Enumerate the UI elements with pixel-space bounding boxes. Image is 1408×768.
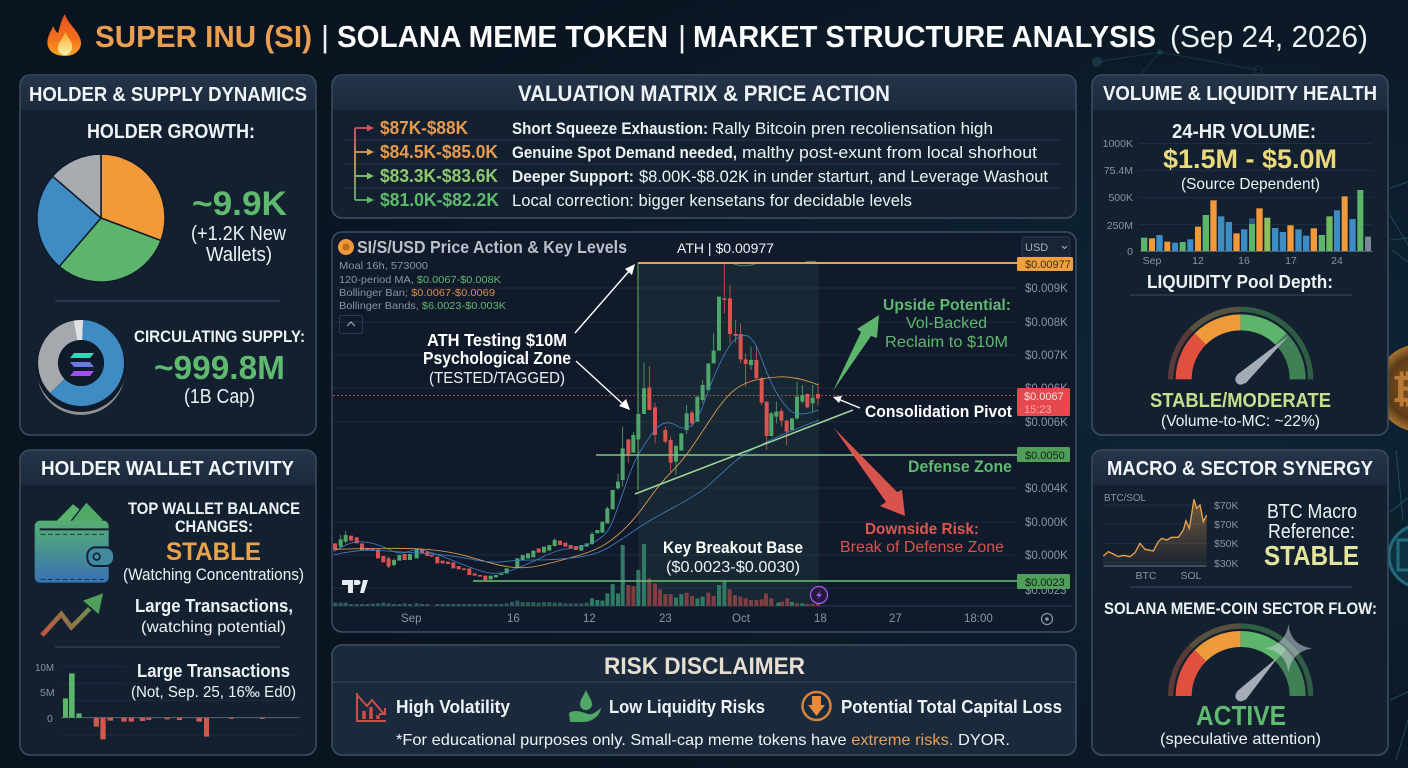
holder count stat	[191, 185, 287, 266]
large transactions note: (watching potential)	[141, 619, 286, 636]
donut chart: circulating supply	[36, 322, 126, 415]
moving average lines	[333, 261, 819, 573]
price axis: $0.009K	[1025, 283, 1068, 295]
indicator legend: Bollinger Bands, $6.0023-$0.003K	[339, 300, 506, 312]
line chart: BTC/SOL: $30K	[1214, 558, 1239, 570]
sector flow status: ACTIVE	[1196, 700, 1286, 731]
bar chart: large transactions: 10M	[35, 662, 54, 674]
item: high volatility	[357, 693, 510, 721]
holder count stat: Wallets)	[206, 244, 272, 266]
icon: lightning badge	[810, 586, 828, 604]
time axis: Sep	[401, 613, 421, 625]
BTC macro stat: BTC Macro	[1267, 501, 1357, 523]
item: low liquidity	[569, 690, 765, 722]
icon: wallet	[35, 502, 114, 583]
BTC macro stat: STABLE	[1264, 540, 1359, 571]
row: short squeeze exhaustion	[380, 118, 993, 138]
icon: falling chart	[357, 693, 386, 721]
panel: valuation matrix and price action	[332, 75, 1076, 218]
row: deeper support: Deeper Support:	[512, 168, 634, 186]
arrow: to ATH	[575, 264, 635, 333]
time axis: 23	[659, 613, 672, 625]
large transactions detail: (Not, Sep. 25, 16‰ Ed0)	[131, 684, 296, 701]
currency selector: USD	[1025, 242, 1048, 254]
tag: defense level	[1017, 447, 1070, 462]
sector flow status: (speculative attention)	[1160, 731, 1321, 748]
row: deeper support	[380, 166, 1048, 186]
row: local correction: $81.0K-$82.2K	[380, 190, 499, 210]
green bodies	[341, 297, 813, 579]
panel: volume and liquidity health	[1092, 75, 1388, 435]
bar chart: 24h volume: 24	[1331, 255, 1343, 267]
heading: holder and supply dynamics: HOLDER & SUPPLY DYNAMICS	[29, 84, 307, 106]
heading: holder wallet activity: HOLDER WALLET ACTIVITY	[41, 458, 295, 480]
arrow: to breakout candle	[576, 361, 630, 410]
heading: risk disclaimer: RISK DISCLAIMER	[604, 653, 805, 680]
tag: ATH price: $0.00977	[1025, 259, 1071, 271]
price axis: $0.007K	[1025, 350, 1068, 362]
heading: volume and liquidity health: VOLUME & LIQUIDITY HEALTH	[1103, 83, 1377, 105]
wicks	[341, 333, 813, 568]
bar chart: 24h volume: 500K	[1108, 192, 1133, 204]
tag: current price: 15:23	[1024, 404, 1052, 416]
row: deeper support: $8.00K-$8.02K in under starturt, and Leverage Washout	[639, 168, 1048, 186]
annotation: downside risk: Break of Defense Zone	[840, 539, 1004, 556]
large transactions detail	[131, 661, 296, 701]
annotation: ATH testing zone: ATH Testing $10M	[427, 330, 567, 350]
line chart: BTC/SOL: SOL	[1180, 570, 1202, 582]
annotation: key breakout base: Key Breakout Base	[663, 539, 803, 557]
price axis: $0.004K	[1025, 483, 1068, 495]
bar chart: large transactions: 0	[47, 713, 53, 725]
tag: base level	[1017, 574, 1070, 589]
circulating supply stat: CIRCULATING SUPPLY:	[134, 327, 305, 346]
annotation: consolidation pivot: Consolidation Pivot	[865, 402, 1012, 421]
bar chart: 24h volume: 17	[1285, 255, 1297, 267]
icon: solana logo	[70, 353, 94, 376]
time axis: 18:00	[964, 613, 993, 625]
annotation: downside risk	[840, 521, 1004, 556]
circulating supply stat: ~999.8M	[154, 349, 285, 386]
volume stat: (Source Dependent)	[1181, 176, 1320, 193]
annotation: key breakout base: ($0.0023-$0.0030)	[666, 559, 800, 576]
annotation: downside risk: Downside Risk:	[865, 521, 979, 538]
holder count stat: (+1.2K New	[191, 223, 286, 245]
BTC macro stat: Reference:	[1268, 521, 1355, 543]
row: short squeeze exhaustion: Rally Bitcoin pren recoliensation high	[712, 120, 993, 138]
icon: flame	[47, 14, 81, 56]
gauge: sector flow	[1171, 624, 1312, 701]
row: short squeeze exhaustion: Short Squeeze Exhaustion:	[512, 120, 708, 138]
bar chart: 24h volume: 16	[1238, 255, 1250, 267]
volume stat: $1.5M - $5.0M	[1163, 144, 1337, 174]
sector flow status	[1160, 700, 1321, 748]
volume stat	[1163, 121, 1337, 193]
pie chart: holder growth	[37, 154, 165, 282]
icon: down arrow in circle	[802, 692, 830, 720]
row: genuine spot demand: malthy post-exunt from local shorhout	[742, 144, 1037, 162]
title: |	[321, 19, 329, 54]
row: deeper support: $83.3K-$83.6K	[380, 166, 498, 186]
annotation: ATH testing zone: Psychological Zone	[423, 348, 571, 368]
title: SOLANA MEME TOKEN	[337, 19, 668, 54]
bar chart: 24h volume: 0	[1127, 246, 1133, 258]
arrow: downside	[834, 428, 905, 516]
line chart: BTC/SOL	[1103, 492, 1239, 582]
wallet balance stat	[123, 499, 304, 584]
collapse button	[340, 316, 362, 334]
annotation: key breakout base	[663, 539, 803, 576]
wallet balance stat: STABLE	[166, 538, 261, 566]
volume stat: 24-HR VOLUME:	[1172, 121, 1316, 143]
line chart: BTC/SOL: $70K	[1214, 500, 1239, 512]
large transactions note	[135, 596, 293, 636]
heading: holder growth: HOLDER GROWTH:	[87, 121, 255, 143]
time axis: 16	[507, 613, 520, 625]
row: genuine spot demand: Genuine Spot Demand needed,	[512, 144, 737, 162]
title: SUPER INU (SI)	[95, 19, 312, 54]
currency selector	[1022, 237, 1070, 257]
item: high volatility: High Volatility	[396, 697, 510, 717]
level line: defense zone	[596, 454, 1017, 456]
row: local correction: Local correction: bigger kensetans for decidable levels	[512, 192, 912, 210]
tag: base level: $0.0023	[1025, 577, 1065, 589]
trend line	[635, 410, 853, 494]
price axis: $0.000K	[1025, 517, 1068, 529]
annotation: upside potential: Reclaim to $10M	[885, 334, 1008, 351]
row: genuine spot demand	[380, 142, 1037, 162]
heading: valuation matrix: VALUATION MATRIX & PRICE ACTION	[518, 81, 890, 106]
annotation: upside potential	[883, 297, 1011, 351]
liquidity status: (Volume-to-MC: ~22%)	[1161, 413, 1320, 430]
price axis: $0.008K	[1025, 317, 1068, 329]
tag: current price: $0.0067	[1024, 391, 1064, 403]
row: local correction	[380, 190, 912, 210]
panel: price chart	[332, 232, 1076, 632]
item: low liquidity: Low Liquidity Risks	[609, 697, 765, 717]
tag: current price	[1017, 388, 1070, 416]
bar chart: 24h volume: 12	[1192, 255, 1204, 267]
arrow: upside	[833, 315, 879, 391]
price axis	[1025, 283, 1068, 597]
time axis: 18	[814, 613, 827, 625]
large transactions detail: Large Transactions	[137, 661, 290, 681]
red bodies	[335, 298, 818, 580]
circulating supply stat: (1B Cap)	[184, 386, 255, 408]
line chart: BTC/SOL: BTC/SOL	[1104, 492, 1146, 504]
bar chart: large transactions: 5M	[40, 687, 55, 699]
time axis	[401, 613, 993, 625]
liquidity status: STABLE/MODERATE	[1150, 390, 1331, 412]
panel: macro and sector synergy	[1092, 450, 1388, 755]
row: short squeeze exhaustion: $87K-$88K	[380, 118, 468, 138]
title: |	[678, 19, 686, 54]
time axis: Oct	[732, 613, 751, 625]
row: genuine spot demand: $84.5K-$85.0K	[380, 142, 498, 162]
icon: trend arrow	[42, 593, 103, 635]
wallet balance stat: TOP WALLET BALANCE	[128, 499, 300, 518]
icon: coin	[338, 239, 354, 255]
indicator legend	[339, 260, 506, 312]
indicator legend: Moal 16h, 573000	[339, 260, 428, 272]
time axis: 12	[583, 613, 596, 625]
bar chart: 24h volume: 1000K	[1103, 138, 1133, 150]
logo: tradingview mark	[342, 580, 368, 593]
icon: settings	[1042, 614, 1052, 624]
wallet balance stat: CHANGES:	[175, 517, 253, 536]
annotation: upside potential: Upside Potential:	[883, 297, 1011, 314]
price axis: $0.0023	[1025, 585, 1067, 597]
line chart: BTC/SOL: $70K	[1214, 519, 1239, 531]
bar chart: large transactions	[35, 662, 300, 739]
annotation: ATH testing zone: (TESTED/TAGGED)	[429, 370, 565, 387]
indicator legend: Bollinger Ban; $0.0067-$0.0069	[339, 287, 495, 299]
icon: bitcoin coin backdrop	[1376, 344, 1408, 432]
chart title: SI/S/USD Price Action & Key Levels	[357, 237, 627, 257]
annotation: upside potential: Vol-Backed	[906, 315, 987, 332]
line chart: BTC/SOL: $50K	[1214, 538, 1239, 550]
icon: chip coin backdrop	[1389, 525, 1408, 587]
circulating supply stat	[134, 327, 305, 408]
panel: risk disclaimer	[332, 645, 1076, 755]
bar chart: 24h volume: Sep	[1143, 255, 1161, 267]
large transactions note: Large Transactions,	[135, 596, 293, 616]
ATH label: ATH | $0.00977	[677, 240, 774, 256]
tag: defense level: $0.0050	[1025, 450, 1065, 462]
BTC macro stat	[1264, 501, 1359, 571]
arrow tree: price levels	[355, 124, 374, 204]
heading: macro and sector synergy: MACRO & SECTOR SYNERGY	[1107, 458, 1374, 480]
panel: holder wallet activity	[20, 450, 316, 755]
wallet balance stat: (Watching Concentrations)	[123, 565, 304, 584]
time axis: 27	[889, 613, 902, 625]
price axis: $0.006K	[1025, 417, 1068, 429]
heading: liquidity pool depth: LIQUIDITY Pool Depth:	[1147, 272, 1333, 292]
panel: holder and supply dynamics	[20, 75, 316, 435]
line chart: BTC/SOL: BTC	[1136, 570, 1157, 582]
title: (Sep 24, 2026)	[1170, 19, 1368, 54]
price axis: $0.000K	[1025, 550, 1068, 562]
title: MARKET STRUCTURE ANALYSIS	[693, 19, 1156, 54]
candlestick chart	[333, 261, 819, 606]
level line: ATH	[638, 262, 1017, 264]
level line: breakout base	[473, 580, 1017, 582]
title	[47, 14, 1368, 56]
item: capital loss: Potential Total Capital Loss	[841, 697, 1062, 717]
item: capital loss	[802, 692, 1062, 720]
price axis: $0.006K	[1025, 383, 1068, 395]
heading: sector flow: SOLANA MEME-COIN SECTOR FLOW:	[1104, 600, 1377, 618]
icon: water drop over hand	[569, 690, 601, 722]
bar chart: 24h volume: 250M	[1107, 220, 1133, 232]
bar chart: 24h volume	[1103, 138, 1373, 267]
volume bars	[335, 544, 818, 606]
annotation: defense zone: Defense Zone	[908, 458, 1012, 476]
gauge: liquidity	[1171, 309, 1311, 385]
holder count stat: ~9.9K	[192, 185, 287, 223]
indicator legend: 120-period MA, $0.0067-$0.008K	[339, 274, 501, 286]
arrow: to pivot	[833, 396, 860, 408]
disclaimer text: *For educational purposes only. Small-cap meme tokens have extreme risks. DYOR.	[396, 732, 1010, 749]
bar chart: 24h volume: 75.4M	[1104, 165, 1133, 177]
liquidity status	[1150, 390, 1331, 430]
annotation: ATH testing zone	[423, 330, 571, 387]
